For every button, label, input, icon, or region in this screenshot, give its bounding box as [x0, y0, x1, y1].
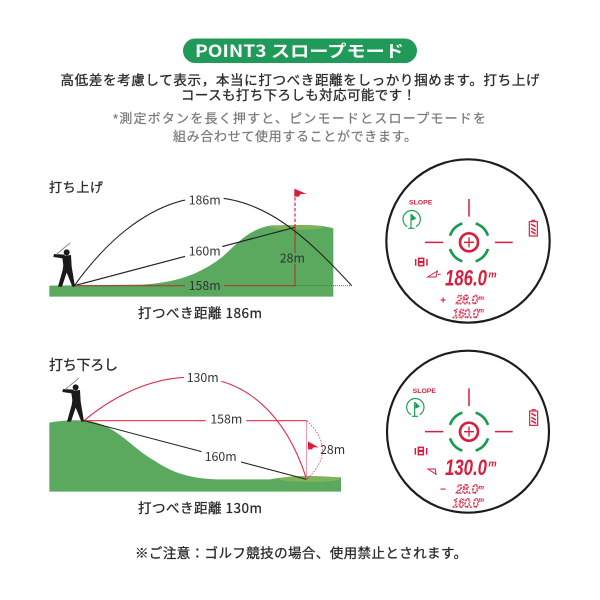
- golfer: [62, 378, 84, 422]
- footer note: ※ご注意：ゴルフ競技の場合、使用禁止とされます。: [135, 542, 467, 562]
- scope: uphill: +: [440, 295, 446, 306]
- scope: uphill: [386, 159, 550, 323]
- arc 186m: [74, 197, 352, 286]
- chart: downhill diagram: [49, 368, 345, 492]
- scope: uphill: 28.0: [455, 292, 478, 307]
- scope: downhill: m: [488, 459, 497, 469]
- arc 130m: [84, 377, 307, 479]
- labels: [189, 190, 305, 294]
- intro text: [60, 72, 540, 103]
- heading: uphill: 打ち上げ: [49, 177, 103, 196]
- labels: 158m: [189, 276, 221, 294]
- title pill: POINT3 スロープモード: [195, 38, 404, 62]
- scope: uphill: m: [478, 295, 484, 302]
- scope: uphill: 186.0: [445, 266, 488, 291]
- labels: 28m: [320, 440, 345, 458]
- intro text: 高低差を考慮して表示，本当に打つべき距離をしっかり掴めます。打ち上げ: [60, 72, 540, 88]
- labels: 160m: [205, 447, 237, 465]
- intro text: コースも打ち下ろしも対応可能です！: [181, 87, 416, 103]
- scope: downhill: 160.0: [453, 495, 479, 510]
- golfer: [53, 243, 75, 287]
- note text: 組み合わせて使用することができます。: [173, 129, 417, 144]
- green hill: [49, 225, 333, 297]
- scope: downhill: m: [478, 497, 484, 504]
- scope: uphill: 160.0: [453, 306, 479, 321]
- chart: uphill diagram: [49, 189, 352, 297]
- flag: [308, 441, 319, 449]
- labels: 186m: [189, 190, 221, 208]
- labels: 130m: [187, 368, 219, 386]
- caption: uphill: 打つべき距離 186m: [138, 302, 262, 322]
- note text: [113, 111, 486, 144]
- caption: downhill: 打つべき距離 130m: [138, 497, 262, 517]
- scope: downhill: −: [440, 485, 446, 496]
- lines: [74, 227, 295, 286]
- note text: *測定ボタンを長く押すと、ピンモードとスロープモードを: [113, 111, 486, 126]
- scope: uphill: SLOPE: [409, 199, 433, 206]
- labels: 160m: [189, 241, 221, 259]
- flag: [294, 189, 307, 197]
- labels: 158m: [210, 410, 242, 428]
- green hill: [49, 420, 341, 492]
- scope: downhill: [387, 351, 549, 513]
- lines: [84, 419, 307, 422]
- scope: downhill: m: [478, 484, 484, 491]
- scope: downhill: 130.0: [445, 455, 488, 480]
- heading: downhill: 打ち下ろし: [49, 355, 118, 375]
- scope: downhill: SLOPE: [413, 388, 437, 395]
- scope: downhill: 28.0: [455, 481, 478, 496]
- labels: [187, 368, 345, 465]
- labels: 28m: [280, 249, 305, 267]
- scope: uphill: m: [478, 308, 484, 315]
- scope: uphill: m: [488, 269, 497, 279]
